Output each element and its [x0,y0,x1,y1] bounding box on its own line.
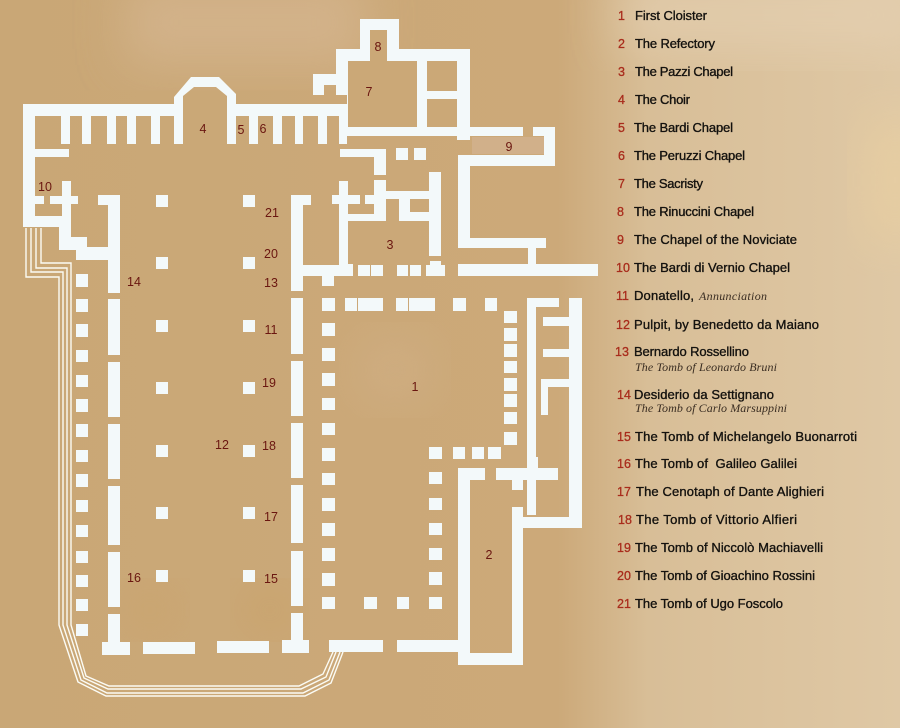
legend item 20: The Tomb of Gioachino Rossini [635,568,815,583]
legend item 11: Donatello, [634,288,694,303]
plan number labels: 4 [200,122,207,136]
legend item 6: The Peruzzi Chapel [634,148,745,163]
plan number labels: 2 [486,548,493,562]
legend item 3: The Pazzi Chapel [635,64,733,79]
legend item 2: The Refectory [635,36,716,51]
legend item 10: 10 [616,261,630,275]
nave piers and west wall [102,298,309,655]
legend item 4: 4 [618,93,625,107]
plan number labels: 3 [387,238,394,252]
legend item 13 [615,344,777,374]
sacristy interior walls [347,30,457,127]
plan number labels: 18 [262,439,276,453]
plan number labels: 19 [262,376,276,390]
plan number labels: 11 [265,323,278,337]
legend item 16: The Tomb of Galileo Galilei [635,456,797,471]
legend item 16: 16 [617,457,631,471]
legend item 5: 5 [618,121,625,135]
legend item 18: The Tomb of Vittorio Alfieri [636,512,797,527]
legend item 9: 9 [617,233,624,247]
refectory and dormitory walls [329,298,582,665]
legend item 4: The Choir [635,92,691,107]
legend item 8: The Rinuccini Chapel [634,204,754,219]
plan number labels: 17 [264,510,278,524]
legend [615,8,857,611]
legend item 11: 11 [616,289,629,303]
legend item 11: Annunciation [698,289,767,303]
legend item 17: 17 [617,485,631,499]
legend item 19: 19 [617,541,631,555]
east wing walls [458,127,598,276]
legend item 3: 3 [618,65,625,79]
legend item 13: 13 [615,345,629,359]
floor plan [23,19,598,696]
legend item 14: The Tomb of Carlo Marsuppini [635,401,787,415]
plan number labels: 5 [238,123,245,137]
plan number labels: 16 [127,571,141,585]
cloister columns [322,298,517,609]
legend item 9: The Chapel of the Noviciate [634,232,797,247]
legend item 17: The Cenotaph of Dante Alighieri [636,484,824,499]
legend item 13: Bernardo Rossellino [634,344,749,359]
legend item 15: 15 [617,430,631,444]
legend item 7: 7 [618,177,625,191]
legend item 10: The Bardi di Vernio Chapel [634,260,790,275]
plan number labels: 20 [264,247,278,261]
plan number labels: 14 [127,275,141,289]
stair lines [26,228,343,696]
plan number labels: 6 [260,122,267,136]
plan number labels: 8 [375,40,382,54]
legend item 11 [616,288,767,303]
legend item 6: 6 [618,149,625,163]
pazzi chapel walls [291,148,445,291]
legend item 5: The Bardi Chapel [634,120,733,135]
chapel of the noviciate tint [472,137,544,154]
plan number labels [38,40,513,586]
legend item 19: The Tomb of Niccolò Machiavelli [635,540,823,555]
plan number labels: 10 [38,180,52,194]
legend item 21: 21 [617,597,631,611]
church walls [23,19,457,293]
legend item 20: 20 [617,569,631,583]
plan number labels: 1 [412,380,419,394]
legend item 14 [617,387,787,415]
legend item 2: 2 [618,37,625,51]
legend item 8: 8 [617,205,624,219]
legend item 1: 1 [618,9,625,23]
legend item 14: Desiderio da Settignano [634,387,774,402]
legend item 15: The Tomb of Michelangelo Buonarroti [635,429,857,444]
legend item 12: Pulpit, by Benedetto da Maiano [634,317,819,332]
plan number labels: 7 [366,85,373,99]
legend item 18: 18 [618,513,632,527]
aisle columns [76,274,88,636]
legend item 1: First Cloister [635,8,708,23]
legend item 13: The Tomb of Leonardo Bruni [635,360,777,374]
plan number labels: 13 [264,276,278,290]
legend item 12: 12 [616,318,630,332]
plan number labels: 15 [264,572,278,586]
legend item 21: The Tomb of Ugo Foscolo [635,596,783,611]
nave columns [156,195,255,582]
legend item 14: 14 [617,388,631,402]
plan number labels: 9 [506,140,513,154]
legend item 7: The Sacristy [634,176,704,191]
plan number labels: 21 [265,206,279,220]
plan number labels: 12 [215,438,229,452]
